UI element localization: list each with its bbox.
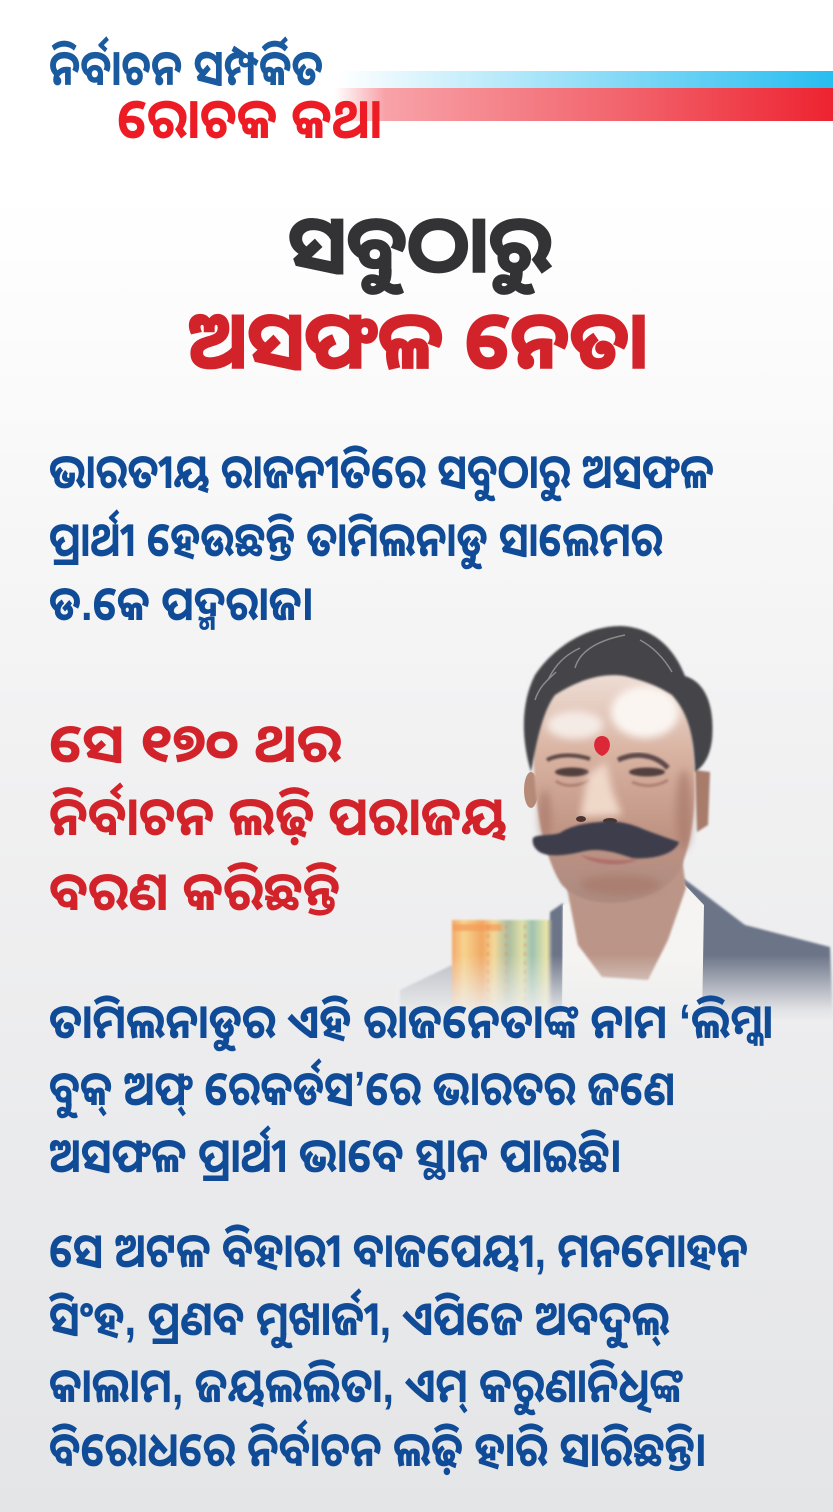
red highlight: 170 election defeats: ସେ ୧୭୦ ଥର <box>49 714 342 774</box>
shirt <box>562 884 704 1020</box>
header: interesting story: ରୋଚକ କଥା <box>117 87 382 150</box>
grey hair streaks <box>535 635 672 700</box>
bindi <box>594 736 610 756</box>
left shoulder <box>400 965 470 1020</box>
header gradient bars <box>335 71 833 121</box>
paragraph 1: ଭାରତୀୟ ରାଜନୀତିରେ ସବୁଠାରୁ ଅସଫଳ <box>49 445 714 502</box>
hair <box>524 626 713 772</box>
header: election related: ନିର୍ବାଚନ ସମ୍ପର୍କିତ <box>49 36 323 96</box>
nose <box>576 762 622 824</box>
red highlight: 170 election defeats: ବରଣ କରିଛନ୍ତି <box>49 862 340 922</box>
bottom fade <box>395 955 833 1023</box>
eyebrows and eyes <box>547 755 668 786</box>
portrait of the politician <box>395 626 833 1023</box>
paragraph 1: ଡ.କେ ପଦ୍ମରାଜ। <box>49 578 314 631</box>
main title: ଅସଫଳ ନେତା <box>188 296 648 385</box>
ears <box>524 770 710 832</box>
mouth <box>580 855 640 864</box>
paragraph 1 <box>49 445 714 631</box>
paragraph 2 <box>49 995 773 1183</box>
paragraph 2: ବୁକ୍ ଅଫ୍ ରେକର୍ଡସ’ରେ ଭାରତର ଜଣେ <box>49 1058 675 1119</box>
red highlight: 170 election defeats: ନିର୍ବାଚନ ଲଢ଼ି ପରାଜୟ <box>49 782 507 847</box>
face <box>533 672 695 903</box>
paragraph 1: ପ୍ରାର୍ଥୀ ହେଉଛନ୍ତି ତାମିଲନାଡୁ ସାଲେମର <box>49 509 663 570</box>
main title <box>188 200 648 385</box>
moustache <box>533 821 679 858</box>
main title: ସବୁଠାରୁ <box>288 200 552 295</box>
face shadows <box>539 770 692 895</box>
paragraph 2: ଅସଫଳ ପ୍ରାର୍ଥୀ ଭାବେ ସ୍ଥାନ ପାଇଛି। <box>49 1125 622 1183</box>
scarf <box>452 920 552 1020</box>
red highlight: 170 election defeats <box>49 714 507 922</box>
paragraph 3: କାଲାମ, ଜୟଲଲିତା, ଏମ୍ କରୁଣାନିଧିଙ୍କ <box>49 1359 683 1416</box>
forehead highlight <box>547 686 679 739</box>
jacket <box>548 878 833 1020</box>
paragraph 3 <box>48 1224 748 1477</box>
neck <box>563 858 686 980</box>
paragraph 3: ବିରୋଧରେ ନିର୍ବାଚନ ଲଢ଼ି ହାରି ସାରିଛନ୍ତି। <box>49 1419 707 1477</box>
paragraph 3: ସିଂହ, ପ୍ରଣବ ମୁଖାର୍ଜୀ, ଏପିଜେ ଅବଦୁଲ୍ <box>48 1288 670 1349</box>
